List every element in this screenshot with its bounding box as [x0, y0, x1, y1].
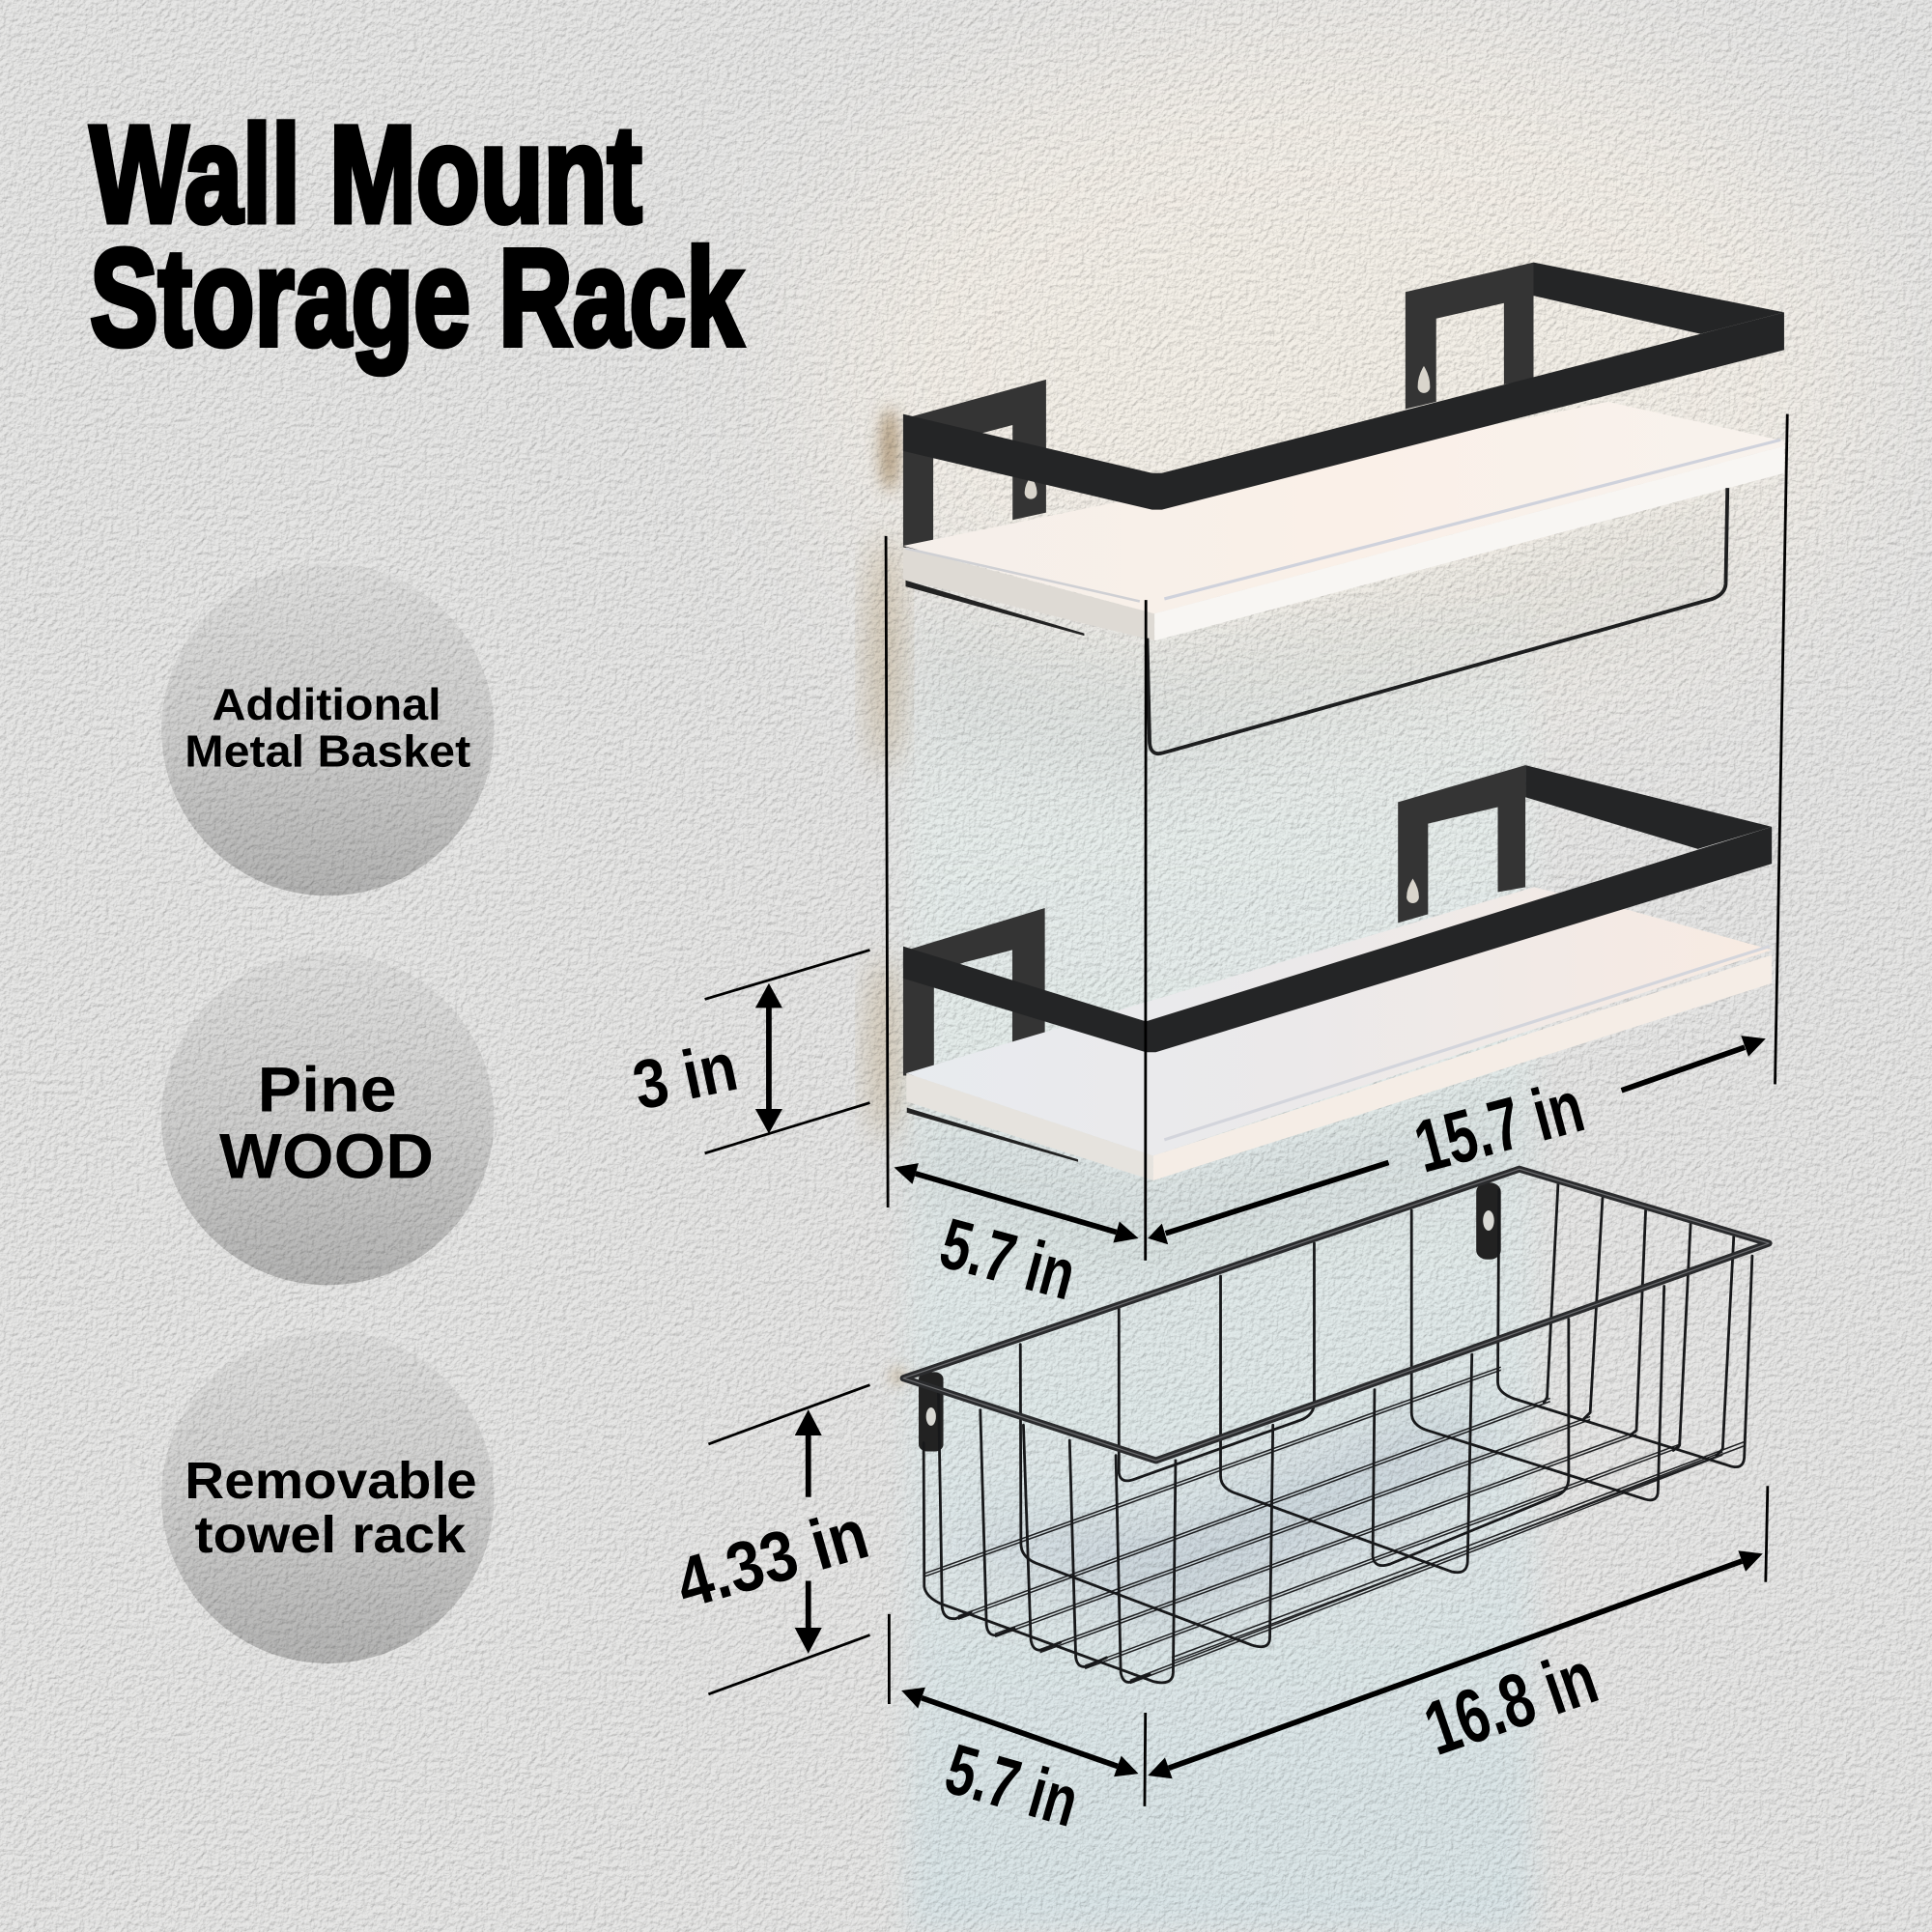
badge: additional metal basket	[161, 563, 494, 895]
wood board of top shelf	[903, 402, 1784, 640]
dimension: 3 in	[627, 950, 870, 1153]
title	[90, 99, 744, 375]
back bracket of middle shelf	[1398, 765, 1525, 923]
dimension: 15.7 in: 15.7 in	[1406, 1065, 1592, 1189]
wire basket	[903, 1169, 1769, 1684]
metal rail of middle shelf	[903, 827, 1772, 1052]
dimension: 16.8 in: 16.8 in	[1414, 1634, 1607, 1772]
dimension: 5.7 in shelf depth	[895, 1163, 1139, 1315]
badge: additional metal basket: Metal Basket	[185, 725, 470, 776]
dimension: overall height and width guide lines	[886, 414, 1787, 1261]
towel bar	[1148, 488, 1727, 753]
title: Wall Mount	[90, 99, 642, 252]
keyhole	[1418, 366, 1430, 393]
top shelf	[903, 263, 1784, 753]
keyhole	[1406, 878, 1419, 903]
badge: removable towel rack	[161, 1331, 494, 1663]
U-shaped cross wires	[923, 1190, 1752, 1683]
dimension: 5.7 in basket depth	[889, 1614, 1146, 1842]
badge: pine wood: WOOD	[219, 1121, 434, 1192]
top rim	[903, 1169, 1769, 1461]
back bracket of top shelf	[1406, 263, 1534, 409]
badge: pine wood	[161, 952, 494, 1285]
badge: pine wood: Pine	[258, 1055, 397, 1126]
mounting plates	[919, 1182, 1501, 1452]
dimension: 16.8 in	[1148, 1486, 1768, 1778]
wood board of middle shelf	[906, 887, 1772, 1180]
badge: removable towel rack: towel rack	[195, 1507, 466, 1564]
dimension: 3 in: 3 in	[627, 1028, 744, 1125]
title: Storage Rack	[90, 221, 744, 375]
dimension: 4.33 in	[668, 1385, 876, 1694]
badge: additional metal basket: Additional	[212, 679, 441, 729]
metal rail of top shelf	[903, 312, 1784, 510]
dimension: 5.7 in shelf depth: 5.7 in	[932, 1203, 1084, 1315]
left bracket of top shelf	[903, 380, 1046, 550]
badge: removable towel rack: Removable	[185, 1453, 477, 1510]
keyhole	[1025, 477, 1037, 499]
dimension: 4.33 in: 4.33 in	[668, 1493, 876, 1624]
floor wires (doubled)	[925, 1367, 1745, 1684]
middle shelf	[903, 765, 1772, 1180]
left bracket of middle shelf	[903, 908, 1045, 1076]
dimension: 5.7 in basket depth: 5.7 in	[937, 1728, 1087, 1842]
dimension: 15.7 in	[1148, 1036, 1766, 1244]
end wires	[938, 1182, 1734, 1682]
